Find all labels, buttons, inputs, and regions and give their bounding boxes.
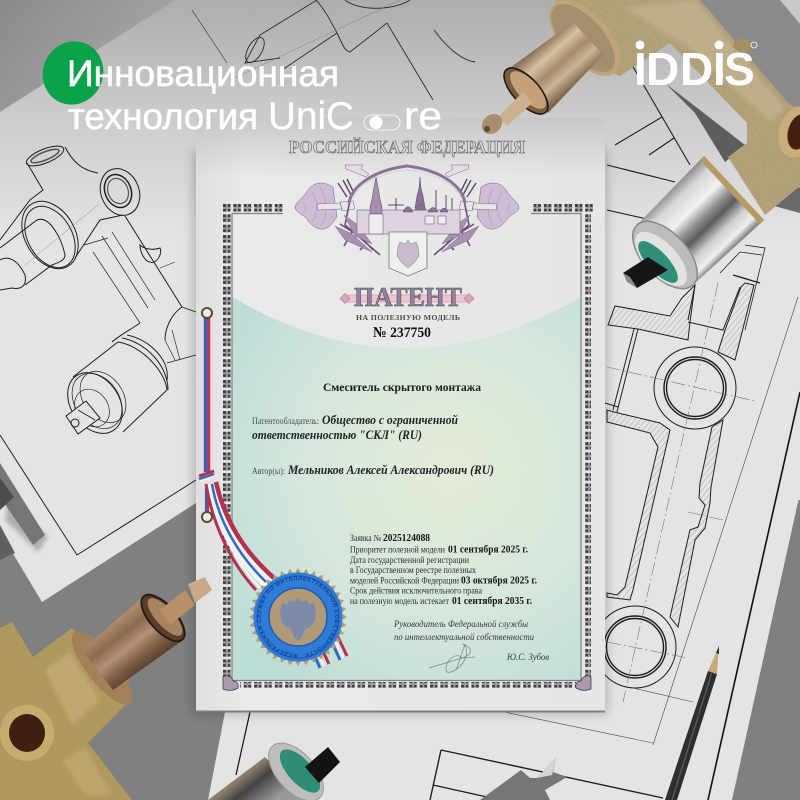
text: patent holder: Общество с ограниченной: [322, 413, 458, 427]
text: registration data: Приоритет полезной модели: [350, 544, 445, 554]
top-left desk corner: [0, 0, 175, 112]
hardware: brass port lower: [0, 705, 54, 761]
ornamental frame: [223, 204, 593, 690]
emblem: wreath with Kremlin: [295, 165, 519, 276]
hatched wall: right top: [718, 283, 754, 360]
text: patent number: № 237750: [373, 325, 431, 341]
signature: [429, 644, 475, 672]
emblem: left lobe and branch: [295, 165, 380, 255]
heading: Russian Federation: РОССИЙСКАЯ ФЕДЕРАЦИЯ: [289, 136, 525, 157]
emblem: Kremlin skyline: [357, 177, 460, 234]
hatched wall: top: [608, 285, 695, 340]
brand UniCore: re: [404, 95, 442, 138]
patent paper: [196, 118, 605, 712]
text: registration data: в Государственном реестре полезных: [350, 565, 476, 575]
title line 2: технология: [68, 96, 258, 137]
drawing sheet: lower sheet: [207, 240, 800, 800]
seal: ФЕДЕРАЛЬНАЯ СЛУЖБА ПО ИНТЕЛЛЕКТУАЛЬНОЙ СОБСТВЕННОСТИ: [257, 576, 339, 658]
hatched wall: left middle: [607, 410, 670, 600]
text: registration data: Дата государственной регистрации: [350, 555, 469, 565]
seal eagle: [280, 597, 316, 641]
text: utility model: НА ПОЛЕЗНУЮ МОДЕЛЬ: [356, 313, 460, 322]
hardware: bottom chrome cartridge: [208, 733, 340, 800]
text: signatory: Руководитель Федеральной службы: [393, 619, 529, 630]
text: registration data: 01 сентября 2025 г.: [448, 544, 528, 556]
hardware: lower-left brass valve body: [0, 622, 142, 800]
ribbon: tricolor cord: [199, 316, 347, 668]
text: registration data: Срок действия исключительного права: [350, 586, 482, 596]
text: signatory: по интеллектуальной собственности: [394, 632, 534, 643]
technical drawing: left valve isometric: [0, 142, 196, 555]
text: signatory: Ю.С. Зубов: [506, 652, 549, 663]
pencil: [665, 646, 719, 800]
text: author: Автор(ы):: [252, 466, 285, 476]
emblem: two-headed eagle: [397, 240, 419, 268]
caliper blade: [537, 758, 556, 778]
text: invention title: Смеситель скрытого монтажа: [323, 382, 481, 394]
text: patent holder: Патентообладатель:: [252, 416, 319, 426]
text: registration data: моделей Российской Федерации: [350, 576, 459, 586]
emblem: shield: [389, 232, 427, 276]
text: patent holder: ответственностью "СКЛ" (RU): [252, 428, 422, 442]
technical drawing: top valve outline: [192, 0, 475, 100]
title block: [32, 31, 442, 138]
text: patent holder: [252, 413, 458, 442]
hardware: lower-left bronze cartridge: [82, 577, 212, 690]
text: registration data: 03 октября 2025 г.: [461, 576, 537, 586]
hardware: upper bronze cartridge: [478, 22, 603, 138]
text: registration data: на полезную модель истекает: [350, 596, 449, 606]
text: registration data: [350, 533, 537, 607]
text: signatory: [393, 619, 549, 663]
desk gap behind brass body: [665, 0, 800, 213]
teal guilloche field: [232, 297, 581, 680]
tool: caliper jaws: [480, 758, 567, 800]
paper top shading: [196, 118, 605, 178]
eyelets: [202, 308, 212, 522]
drawing sheet: upper sheet: [0, 0, 800, 602]
hardware: brass port: [773, 102, 800, 162]
patent shadow: [192, 150, 608, 715]
hatched wall: right arm: [670, 420, 723, 627]
title line 1: Инновационная: [67, 53, 339, 94]
paper bottom edge: [196, 710, 605, 712]
technical drawing: right section view: [236, 65, 800, 800]
emblem: wreath ribbon: [349, 166, 465, 203]
tool: grey bracket at left edge: [0, 463, 48, 560]
hardware: upper brass valve body: [536, 0, 800, 215]
text: registration data: Заявка №: [350, 533, 381, 543]
emblem: right lobe and branch: [434, 165, 519, 255]
text: author: Мельников Алексей Александрович (RU): [287, 463, 494, 477]
text: registration data: 2025124088: [383, 533, 430, 544]
hardware: chrome cartridge: [621, 158, 762, 300]
green blob: [32, 31, 114, 115]
brand UniCore: UniC: [268, 95, 354, 138]
heading: patent: ПАТЕНТ: [354, 282, 462, 312]
logo: IDDIS: IDDIS: [634, 43, 755, 95]
panel: patent certificate: [196, 136, 605, 712]
text: registration data: 01 сентября 2035 г.: [452, 596, 532, 607]
sheet edge under patent: [196, 700, 225, 800]
brand UniCore: [268, 95, 442, 138]
